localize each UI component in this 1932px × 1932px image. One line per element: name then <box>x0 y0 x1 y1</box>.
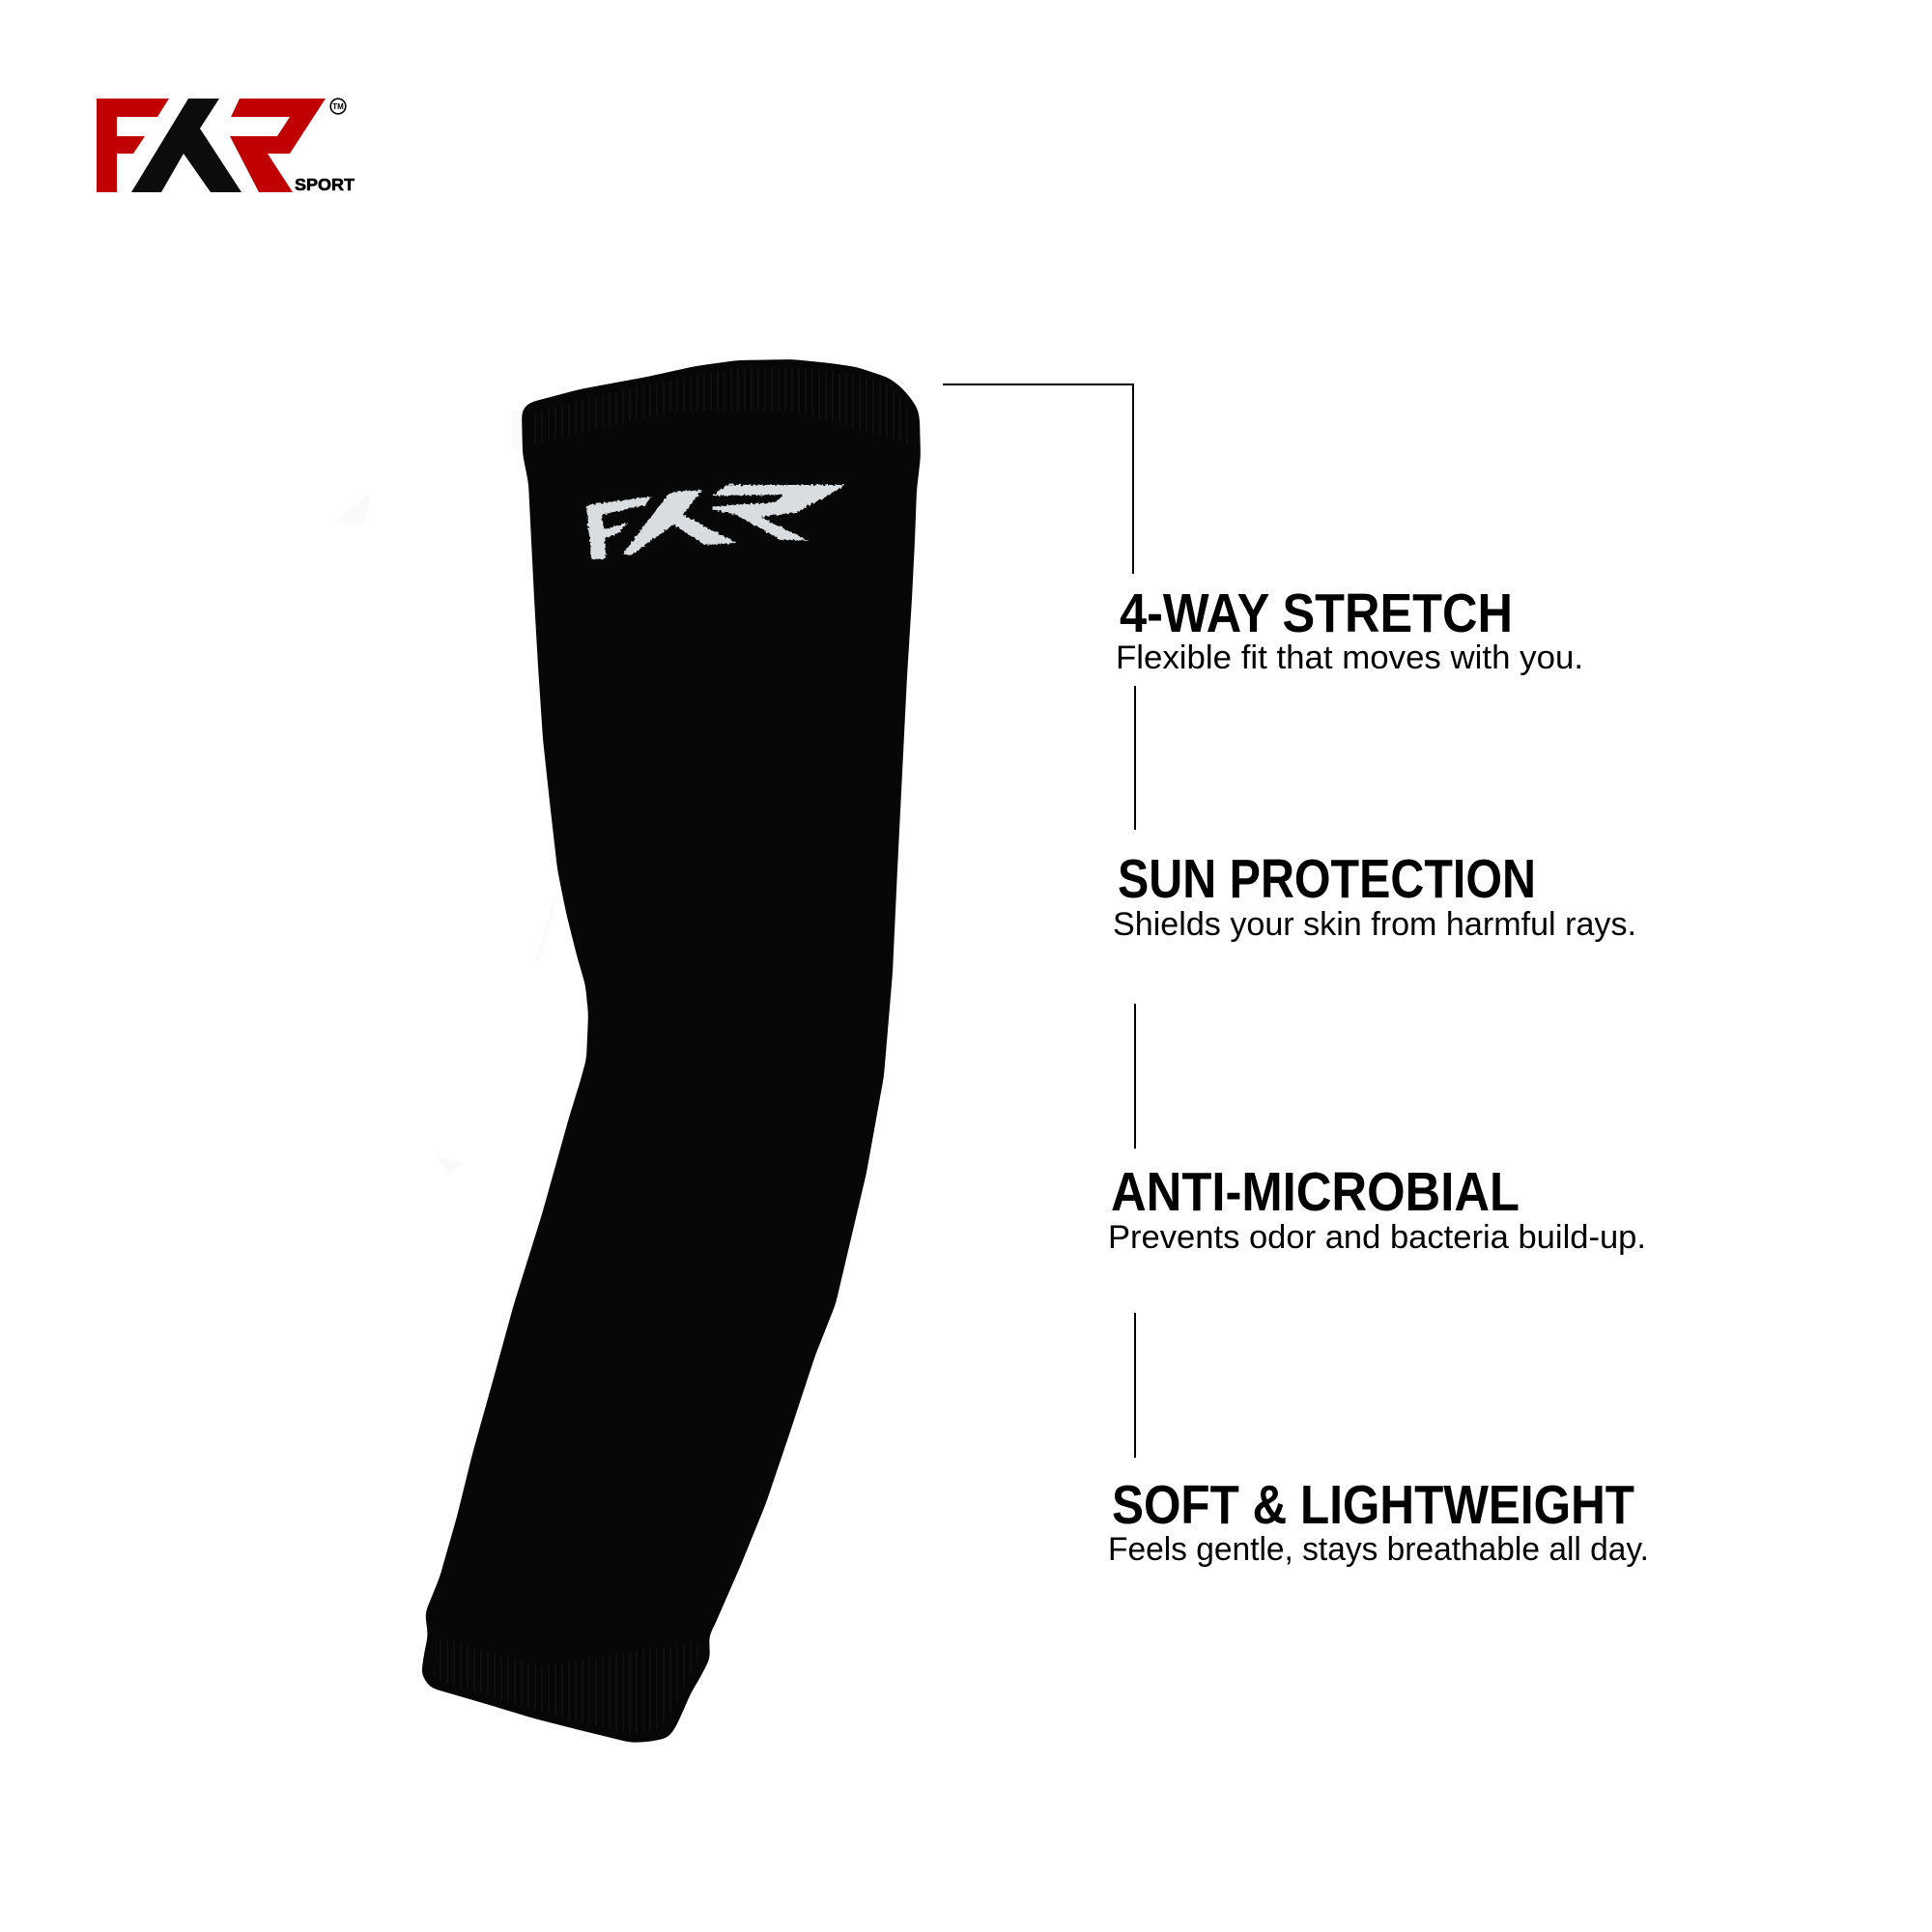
feature: soft and lightweight <box>1108 1474 1649 1568</box>
knit letter F <box>586 497 652 559</box>
feature: sun protection <box>1113 848 1636 943</box>
sleeve body <box>421 359 921 1743</box>
heading: SOFT & LIGHTWEIGHT <box>1112 1474 1634 1536</box>
logo letter R <box>230 99 326 192</box>
sleeve logo: FXR knit mark <box>586 485 845 559</box>
product: black arm sleeve <box>421 359 921 1743</box>
knit letter X <box>623 490 736 555</box>
top cuff ribbing <box>533 367 913 444</box>
background smudges <box>333 411 555 1174</box>
knit letter R <box>712 485 845 541</box>
description: Prevents odor and bacteria build-up. <box>1108 1219 1646 1256</box>
logo: FXR Sport <box>97 99 355 194</box>
bottom cuff ribbing <box>433 1637 699 1734</box>
trademark symbol: TM <box>332 102 344 111</box>
description: Feels gentle, stays breathable all day. <box>1108 1531 1649 1568</box>
trademark symbol <box>330 99 346 114</box>
description: Shields your skin from harmful rays. <box>1113 906 1636 943</box>
logo letter F <box>97 99 169 192</box>
logo word SPORT: SPORT <box>295 175 355 194</box>
logo letter X <box>131 99 242 192</box>
callout connector lines <box>943 384 1136 1458</box>
heading: 4-WAY STRETCH <box>1120 582 1513 644</box>
feature: anti-microbial <box>1108 1161 1646 1256</box>
heading: ANTI-MICROBIAL <box>1111 1161 1520 1223</box>
feature: 4-way stretch <box>1116 582 1583 676</box>
description: Flexible fit that moves with you. <box>1116 639 1583 676</box>
heading: SUN PROTECTION <box>1118 848 1536 910</box>
